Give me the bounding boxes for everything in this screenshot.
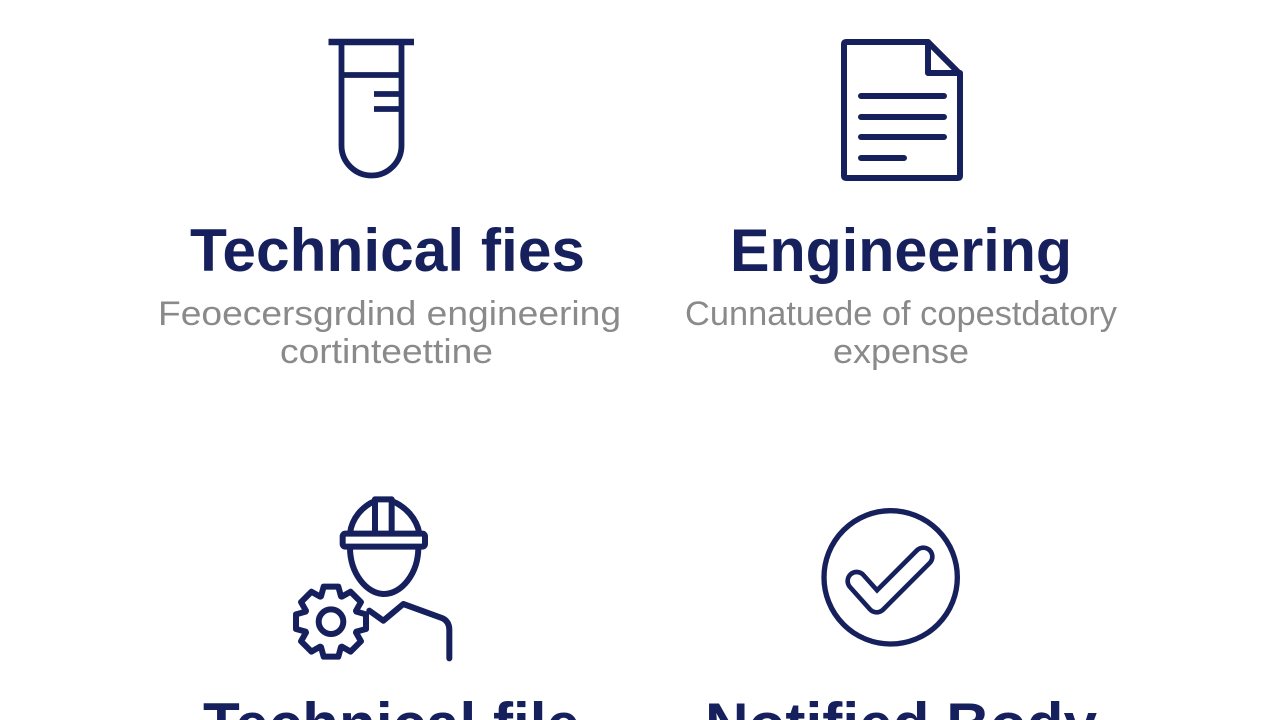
hard hat	[343, 499, 425, 547]
gear	[296, 587, 366, 657]
shoulders	[369, 604, 449, 658]
description: technical files	[158, 295, 621, 371]
description: engineering: expense	[833, 333, 969, 371]
panel: engineering	[685, 42, 1117, 371]
heading: technical files: Technical fies	[190, 217, 585, 284]
heading: engineering: Engineering	[730, 217, 1072, 284]
panel: technical files	[158, 42, 621, 371]
description: technical files: cortinteettine	[280, 333, 493, 371]
description: engineering: Cunnatuede of copestdatory	[685, 295, 1117, 333]
panel: notified body	[705, 511, 1098, 720]
description: technical files: Feoecersgrdind engineering	[158, 295, 621, 333]
icon: check mark in circle	[824, 511, 957, 644]
icon: engineer with gear	[296, 499, 449, 658]
face	[350, 547, 418, 594]
icon: document	[844, 42, 960, 178]
panel: technical file	[203, 499, 580, 720]
icon: test tube	[328, 42, 414, 176]
description: engineering	[685, 295, 1117, 371]
